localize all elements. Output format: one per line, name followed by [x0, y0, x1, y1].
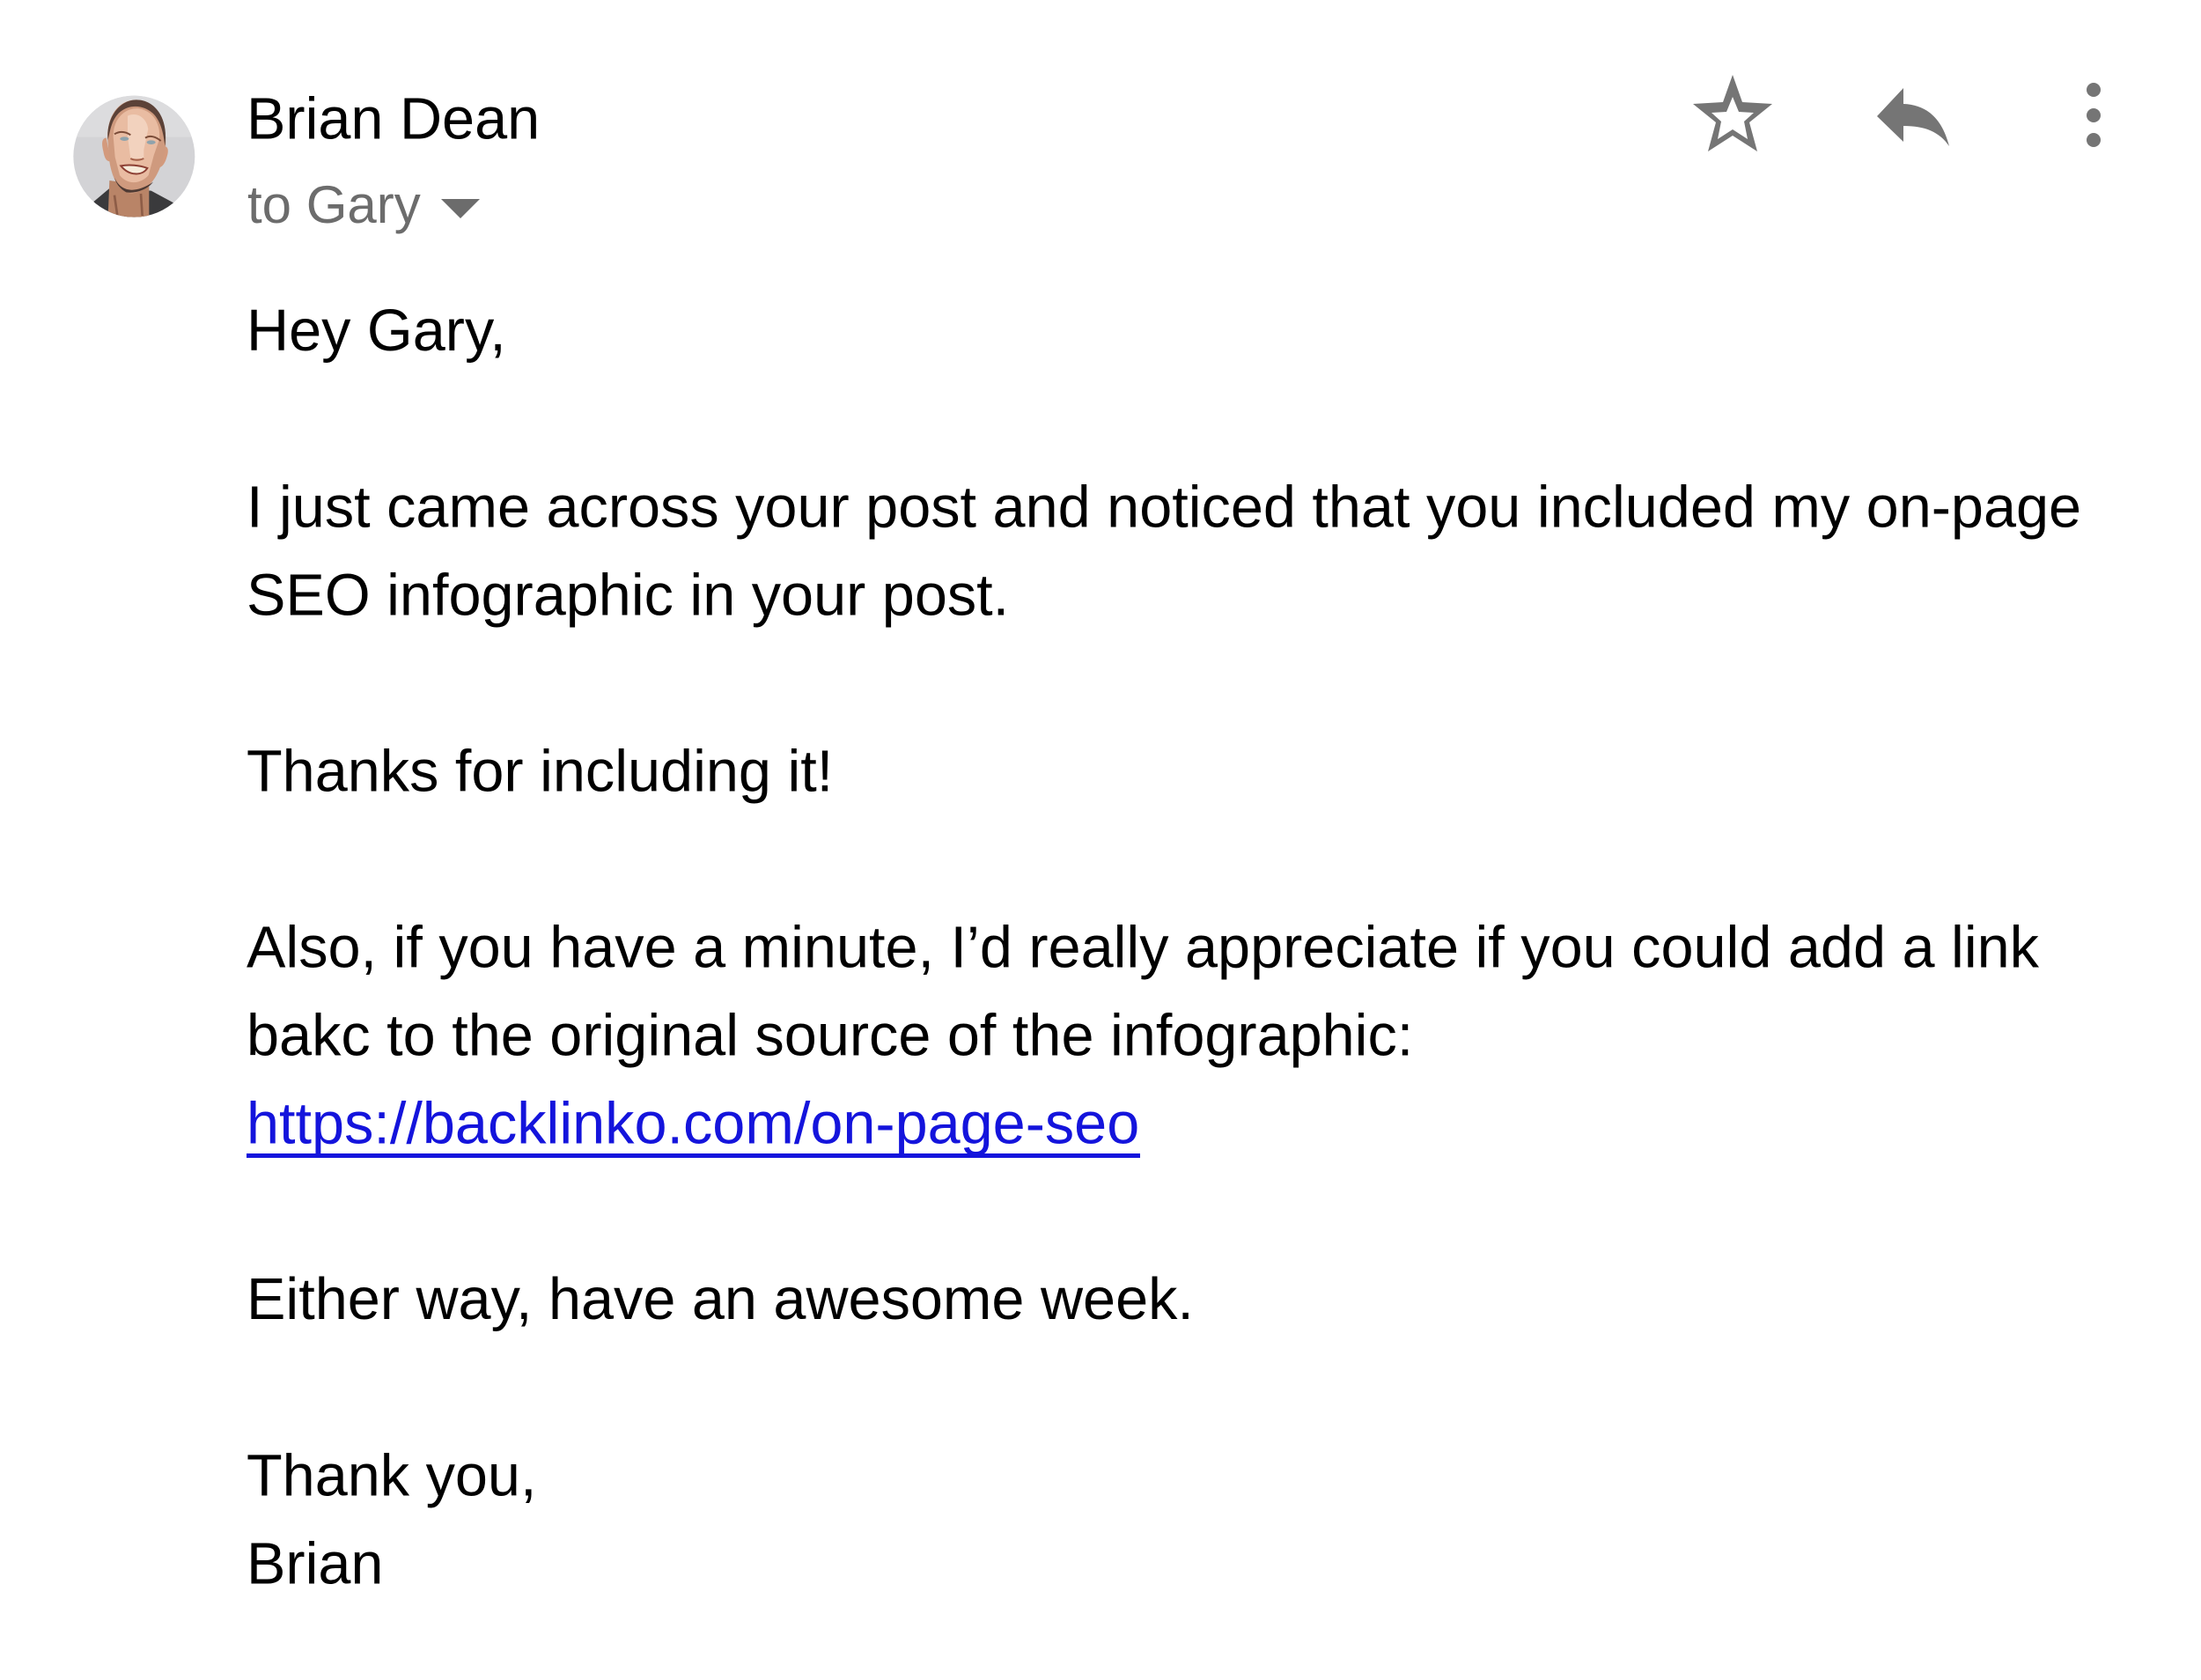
icon: sender avatar photo	[73, 95, 195, 217]
signature	[247, 1444, 536, 1597]
signature: Brian	[247, 1532, 383, 1597]
icon: dropdown arrow	[441, 199, 480, 218]
link: https://backlinko.com/on-page-seo	[247, 1092, 1139, 1157]
paragraph: link request: bakc to the original source of the infographic:	[247, 1004, 1413, 1069]
signature: Thank you,	[247, 1444, 536, 1509]
icon: star	[1693, 75, 1772, 151]
paragraph: link request: Also, if you have a minute, I’d really appreciate if you could add a link	[247, 916, 2040, 981]
paragraph: thanks: Thanks for including it!	[247, 740, 833, 805]
icon: reply arrow	[1877, 88, 1949, 146]
paragraph: link request	[247, 916, 2040, 1069]
paragraph: noticed the infographic: I just came across your post and noticed that you included my on-page	[247, 475, 2081, 541]
sender name: Brian Dean	[247, 86, 540, 151]
recipient line: to Gary	[247, 175, 421, 234]
icon: more menu dots	[2087, 83, 2101, 147]
paragraph: closing: Either way, have an awesome week.	[247, 1267, 1194, 1332]
greeting: Hey Gary,	[247, 298, 506, 364]
paragraph: noticed the infographic: SEO infographic in your post.	[247, 564, 1009, 629]
paragraph: noticed the infographic	[247, 475, 2081, 629]
